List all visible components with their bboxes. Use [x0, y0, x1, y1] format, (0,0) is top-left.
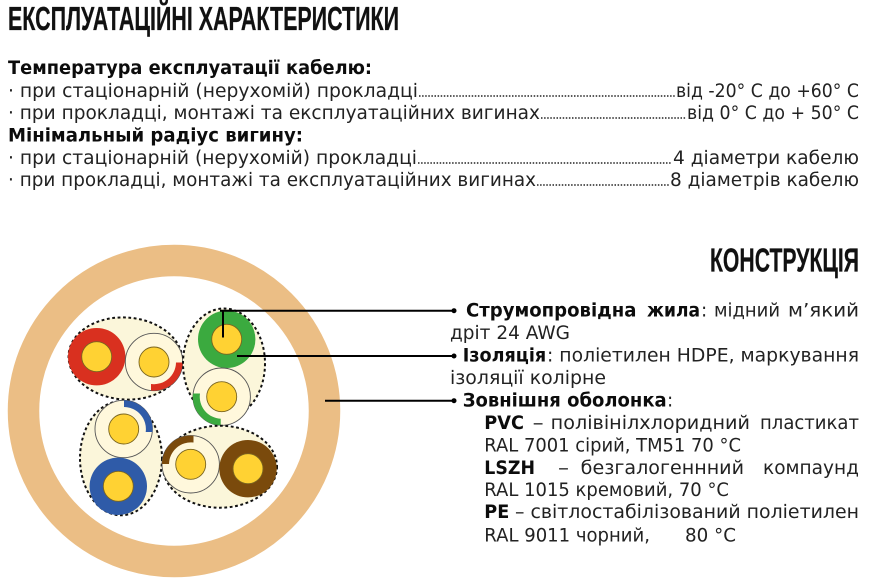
- sheath option: PVC: PVC: [484, 413, 524, 434]
- wire pair: green: [183, 308, 265, 425]
- diagram: cable cross-section: [24, 260, 324, 562]
- text block: conductor: дріт 24 AWG: [450, 323, 570, 344]
- text block: operating temperature and bend radius: [8, 58, 859, 191]
- sheath option: PVC: [484, 413, 859, 457]
- wire pair: red: [66, 314, 185, 403]
- subheading: temperature: Температура експлуатації кабелю:: [8, 58, 372, 79]
- wire pair: blue: [80, 400, 162, 515]
- row: stationary temperature: · при стаціонарній (нерухомій) прокладці: [8, 81, 418, 102]
- text block: outer sheath: [463, 391, 859, 547]
- sheath option: PE: – світлостабілізований поліетилен: [515, 502, 859, 523]
- sheath option: PE: PE: [484, 502, 509, 523]
- row: stationary bend radius: 4 діаметри кабелю: [673, 148, 859, 169]
- sheath option: PE: 80 °С: [685, 526, 736, 547]
- text block: conductor: Струмопровідна: [466, 301, 636, 322]
- sheath option: PVC: полівінілхлоридний: [551, 413, 750, 434]
- text block: insulation: : поліетилен HDPE, маркування: [547, 346, 859, 367]
- heading: operating characteristics: ЕКСПЛУАТАЦІЙНІ ХАРАКТЕРИСТИКИ: [8, 0, 399, 37]
- row: stationary bend radius: [8, 148, 859, 169]
- sheath option: PE: [484, 502, 859, 547]
- sheath option: PVC: RAL 7001 сірий, ТМ51 70 °С: [484, 436, 741, 457]
- sheath option: PVC: пластикат: [760, 413, 859, 434]
- row: installation bend radius: · при прокладці, монтажі та експлуатаційних вигинах: [8, 170, 536, 191]
- sheath option: LSZH: безгалогеннний: [581, 458, 744, 479]
- row: installation bend radius: [8, 170, 859, 191]
- row: stationary temperature: від -20° С до +60° С: [676, 81, 859, 102]
- row: stationary bend radius: · при стаціонарній (нерухомій) прокладці: [8, 148, 417, 169]
- sheath option: LSZH: [484, 458, 859, 501]
- sheath option: LSZH: RAL 1015 кремовий, 70 °С: [484, 480, 729, 501]
- row: installation temperature: від 0° С до + 50° С: [687, 103, 859, 124]
- text block: conductor: :: [701, 301, 707, 322]
- text block: insulation: ізоляції колірне: [450, 368, 606, 389]
- row: stationary temperature: [8, 81, 859, 102]
- text block: conductor: мідний: [714, 301, 780, 322]
- row: installation temperature: [8, 103, 859, 124]
- sheath option: LSZH: компаунд: [763, 458, 859, 479]
- subheading: bend radius: Мінімальный радіус вигину:: [8, 126, 303, 146]
- row: installation temperature: · при прокладці, монтажі та експлуатаційних вигинах: [8, 103, 540, 124]
- text block: conductor: жила: [647, 301, 700, 322]
- sheath option: LSZH: –: [558, 458, 569, 479]
- wire pair: brown: [162, 426, 277, 508]
- sheath option: PE: RAL 9011 чорний,: [484, 526, 650, 547]
- text block: outer sheath: Зовнішня оболонка: [463, 391, 667, 412]
- text block: insulation: [450, 346, 859, 389]
- text block: insulation: Ізоляція: [463, 346, 546, 367]
- outer sheath ring: [24, 260, 324, 562]
- text block: outer sheath: :: [667, 391, 673, 412]
- text block: conductor: м’який: [788, 301, 859, 322]
- sheath option: PVC: –: [533, 413, 544, 434]
- sheath option: LSZH: LSZH: [484, 458, 535, 479]
- row: installation bend radius: 8 діаметрів кабелю: [670, 170, 859, 191]
- callout lines: [220, 308, 456, 403]
- text block: conductor: [450, 301, 859, 344]
